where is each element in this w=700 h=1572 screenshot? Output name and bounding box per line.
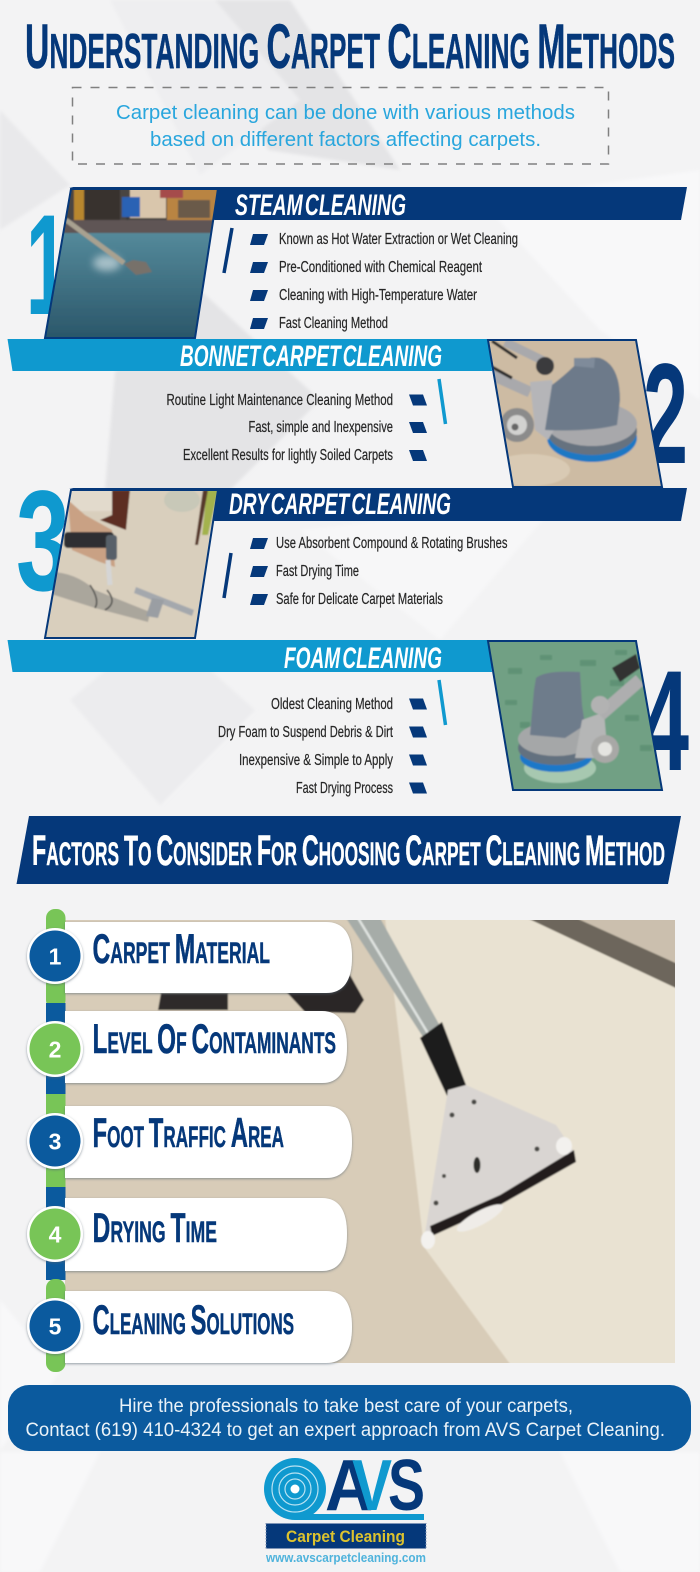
- panel: bonnet carpet cleaning: [8, 335, 688, 494]
- icon: carpet roll: [264, 1458, 424, 1520]
- factors banner: FACTORS TO CONSIDER FOR CHOOSING CARPET CLEANING METHOD: [32, 827, 665, 875]
- factor 2: level of contaminants: [27, 1011, 347, 1083]
- factors banner: [16, 816, 681, 884]
- factor 3: foot traffic area: 3: [49, 1128, 61, 1154]
- photo: foam machine on green carpet: [485, 638, 665, 793]
- logo: AVS Carpet Cleaning: [264, 1446, 426, 1565]
- footer call to action: [8, 1385, 691, 1451]
- list: dry cleaning points: Safe for Delicate Carpet Materials: [276, 591, 443, 608]
- list: foam cleaning points: Fast Drying Process: [296, 780, 393, 797]
- accent stripe: [224, 228, 232, 273]
- list: dry cleaning points: [250, 535, 508, 608]
- number 1: 1: [26, 186, 68, 345]
- list: foam cleaning points: Oldest Cleaning Method: [271, 696, 393, 713]
- factor 3: foot traffic area: FOOT TRAFFIC AREA: [92, 1109, 284, 1156]
- intro callout: [72, 88, 608, 164]
- footer call to action: Contact (619) 410-4324 to get an expert approach from AVS Carpet Cleaning.: [26, 1420, 665, 1441]
- factor 1: carpet material: [27, 922, 352, 993]
- list: dry cleaning points: Fast Drying Time: [276, 563, 359, 580]
- factor 2: level of contaminants: LEVEL OF CONTAMINANTS: [92, 1015, 336, 1062]
- intro callout: Carpet cleaning can be done with various methods: [116, 102, 575, 124]
- accent stripe: [439, 680, 446, 725]
- heading bar: steam cleaning: STEAM CLEANING: [235, 189, 406, 222]
- photo: hand-held dry cleaning tool: [46, 491, 217, 637]
- logo letters: V: [352, 1446, 392, 1526]
- timeline stripe: [46, 909, 66, 1372]
- factor 5: cleaning solutions: CLEANING SOLUTIONS: [92, 1296, 294, 1343]
- heading bar: bonnet carpet cleaning: [8, 339, 492, 373]
- logo banner: [266, 1524, 426, 1548]
- accent stripe: [439, 379, 446, 424]
- website: www.avscarpetcleaning.com: [265, 1550, 426, 1565]
- factor 4: drying time: DRYING TIME: [92, 1204, 217, 1251]
- intro callout: based on different factors affecting carpets.: [150, 129, 541, 151]
- factor 3: foot traffic area: [27, 1106, 352, 1178]
- panel: foam cleaning: [8, 638, 689, 801]
- factor timeline: [27, 909, 352, 1372]
- photo: steam wand on teal carpet: [46, 190, 217, 337]
- list: bonnet cleaning points: [166, 392, 427, 464]
- factor 5: cleaning solutions: [27, 1291, 352, 1363]
- list: dry cleaning points: Use Absorbent Compound & Rotating Brushes: [276, 535, 508, 552]
- list: steam cleaning points: Known as Hot Water Extraction or Wet Cleaning: [279, 231, 518, 248]
- photo: bonnet machine on beige floor: [489, 341, 661, 486]
- logo letters: S: [388, 1446, 425, 1526]
- number 3: 3: [16, 462, 70, 621]
- list: steam cleaning points: Pre-Conditioned with Chemical Reagent: [279, 259, 483, 276]
- factor 4: drying time: [27, 1198, 347, 1271]
- factor 2: level of contaminants: 2: [49, 1036, 61, 1062]
- heading bar: foam cleaning: FOAM CLEANING: [284, 642, 442, 675]
- panel: dry carpet cleaning: [18, 488, 687, 639]
- list: steam cleaning points: Cleaning with High-Temperature Water: [279, 287, 477, 304]
- accent stripe: [224, 553, 231, 598]
- factor 4: drying time: 4: [49, 1222, 62, 1248]
- footer call to action: Hire the professionals to take best care of your carpets,: [119, 1396, 573, 1417]
- factor 5: cleaning solutions: 5: [49, 1314, 62, 1340]
- list: bonnet cleaning points: Excellent Results for lightly Soiled Carpets: [183, 447, 393, 464]
- list: bonnet cleaning points: Fast, simple and Inexpensive: [248, 419, 393, 436]
- factor 1: carpet material: 1: [49, 944, 62, 970]
- photo: carpet cleaning wand: [60, 918, 680, 1368]
- list: foam cleaning points: Dry Foam to Suspend Debris & Dirt: [218, 724, 393, 741]
- logo letters: [325, 1446, 425, 1526]
- list: foam cleaning points: Inexpensive & Simple to Apply: [239, 752, 393, 769]
- heading bar: bonnet carpet cleaning: BONNET CARPET CLEANING: [180, 340, 442, 373]
- heading bar: dry carpet cleaning: DRY CARPET CLEANING: [229, 488, 451, 521]
- list: foam cleaning points: [218, 696, 427, 797]
- logo letters: A: [325, 1446, 373, 1526]
- heading bar: dry carpet cleaning: [69, 488, 687, 521]
- list: steam cleaning points: [250, 231, 518, 332]
- heading bar: foam cleaning: [8, 640, 492, 675]
- factor 1: carpet material: CARPET MATERIAL: [92, 925, 270, 972]
- heading bar: steam cleaning: [69, 187, 687, 222]
- panel: steam cleaning: [26, 185, 687, 345]
- list: bonnet cleaning points: Routine Light Maintenance Cleaning Method: [166, 392, 393, 409]
- list: steam cleaning points: Fast Cleaning Method: [279, 315, 388, 332]
- logo banner: Carpet Cleaning: [286, 1527, 405, 1546]
